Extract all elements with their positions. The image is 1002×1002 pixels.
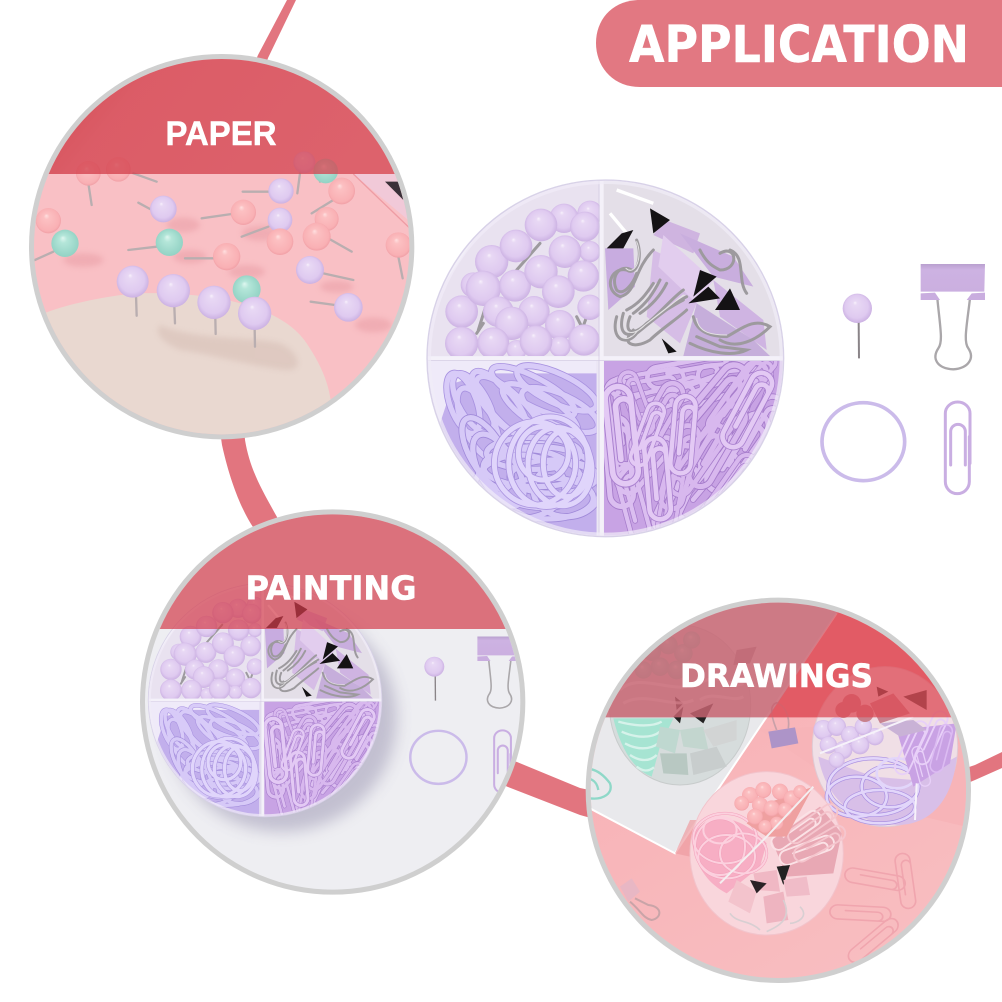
label: drawings: DRAWINGS (680, 657, 873, 695)
drawings heading band (606, 602, 952, 718)
loose clips and paperclips (620, 703, 917, 966)
items: pushpin, binder clip, rubber band, paper clip (822, 264, 985, 494)
paper heading band (48, 59, 395, 174)
panel: drawings (580, 590, 980, 990)
label: painting: PAINTING (246, 568, 416, 608)
panel: paper (20, 50, 420, 450)
items: painting (410, 637, 521, 793)
label: paper: PAPER (166, 115, 276, 153)
painting heading band (160, 514, 506, 629)
pushpins scattered (36, 151, 411, 322)
pushpins standing row (117, 266, 271, 347)
pink tray (690, 772, 848, 935)
header banner: application (596, 0, 1002, 87)
tray: main organizer (420, 170, 791, 541)
decorative red curve (216, 0, 1002, 833)
header banner: application: APPLICATION (629, 16, 969, 75)
tray: painting (144, 577, 386, 819)
panel: painting (135, 505, 535, 905)
mint tray (609, 625, 757, 785)
purple tray (812, 667, 958, 827)
